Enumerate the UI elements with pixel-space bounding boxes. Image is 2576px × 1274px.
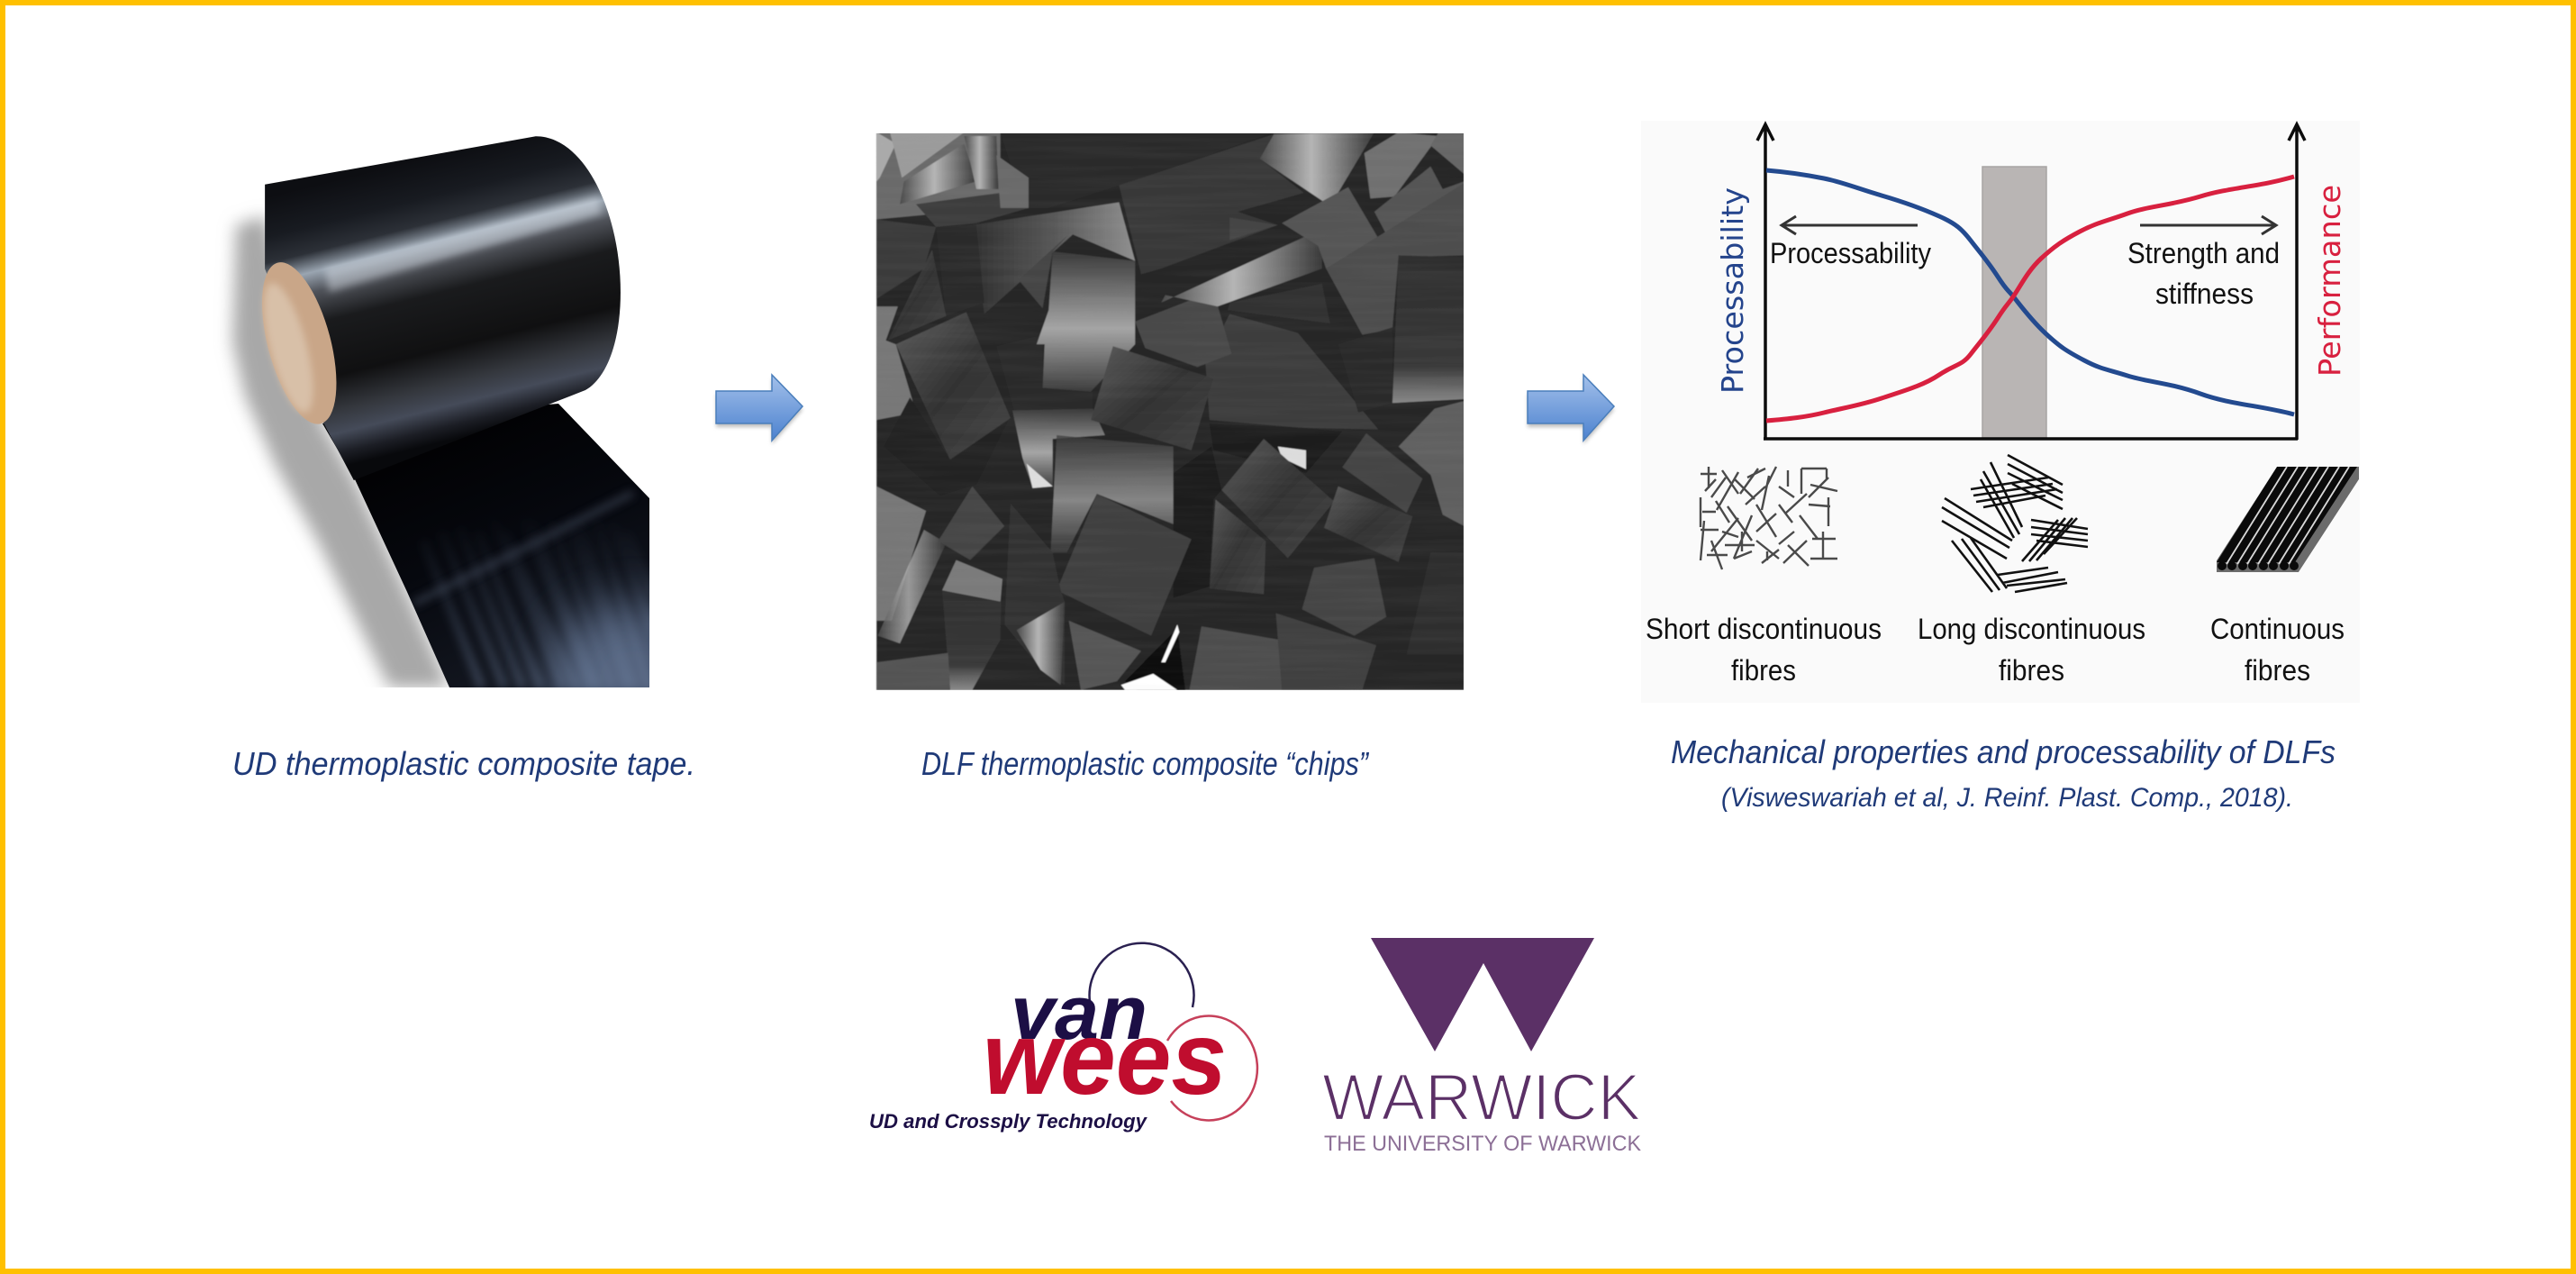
arrow: strength direction (2140, 216, 2276, 234)
curve: performance (1766, 177, 2294, 421)
label: processability: Processability (1770, 237, 1931, 269)
arrow: tape to chips (716, 375, 803, 444)
caption: DLF chips: DLF thermoplastic composite “chips” (921, 745, 1370, 782)
label: continuous fibres (2210, 613, 2345, 687)
label: strength and stiffness: stiffness (2155, 278, 2254, 310)
label: continuous fibres: Continuous (2210, 613, 2345, 645)
caption: citation: (Visweswariah et al, J. Reinf. Plast. Comp., 2018). (1721, 783, 2293, 813)
label: continuous fibres: fibres (2245, 654, 2310, 687)
logo: University of Warwick (1322, 938, 1641, 1156)
label: short discontinuous fibres (1646, 613, 1882, 687)
icon: continuous fibres (2217, 467, 2359, 572)
caption: UD tape: UD thermoplastic composite tape. (232, 745, 695, 782)
photo: DLF thermoplastic composite chips (875, 132, 1464, 690)
chart axes (1757, 124, 2305, 440)
unrolled tape (322, 404, 649, 687)
photo: UD thermoplastic composite tape roll (222, 136, 649, 687)
arrow: chips to properties chart (1528, 375, 1614, 444)
curve: processability (1766, 170, 2294, 414)
caption: mechanical properties: Mechanical properties and processability of DLFs (1671, 733, 2336, 770)
label: strength and stiffness: Strength and (2127, 237, 2280, 269)
label: short discontinuous fibres: Short discontinuous (1646, 613, 1882, 645)
label: long discontinuous fibres (1918, 613, 2145, 687)
icon: long discontinuous fibres (1942, 455, 2088, 592)
y axis label: performance: Performance (2312, 185, 2347, 377)
arrow: processability direction (1782, 216, 1918, 234)
logo: University of Warwick: THE UNIVERSITY OF WARWICK (1324, 1132, 1641, 1156)
logo: van Wees: van (1011, 970, 1147, 1055)
logo: van Wees: UD and Crossply Technology (869, 1110, 1148, 1133)
panel: processability and performance chart with fibre types (1641, 121, 2360, 703)
logo: van Wees: wees (983, 1001, 1227, 1116)
label: strength and stiffness (2127, 237, 2280, 310)
y axis label: processability: Processability (1715, 187, 1750, 394)
label: long discontinuous fibres: fibres (1999, 654, 2064, 687)
grey transition band (1982, 167, 2046, 439)
logo: van Wees (869, 943, 1257, 1133)
roll cast shadow (232, 216, 449, 687)
label: long discontinuous fibres: Long discontinuous (1918, 613, 2145, 645)
icon: short discontinuous fibres (1701, 467, 1837, 569)
label: short discontinuous fibres: fibres (1731, 654, 1796, 687)
logo: University of Warwick: WARWICK (1322, 1061, 1641, 1134)
